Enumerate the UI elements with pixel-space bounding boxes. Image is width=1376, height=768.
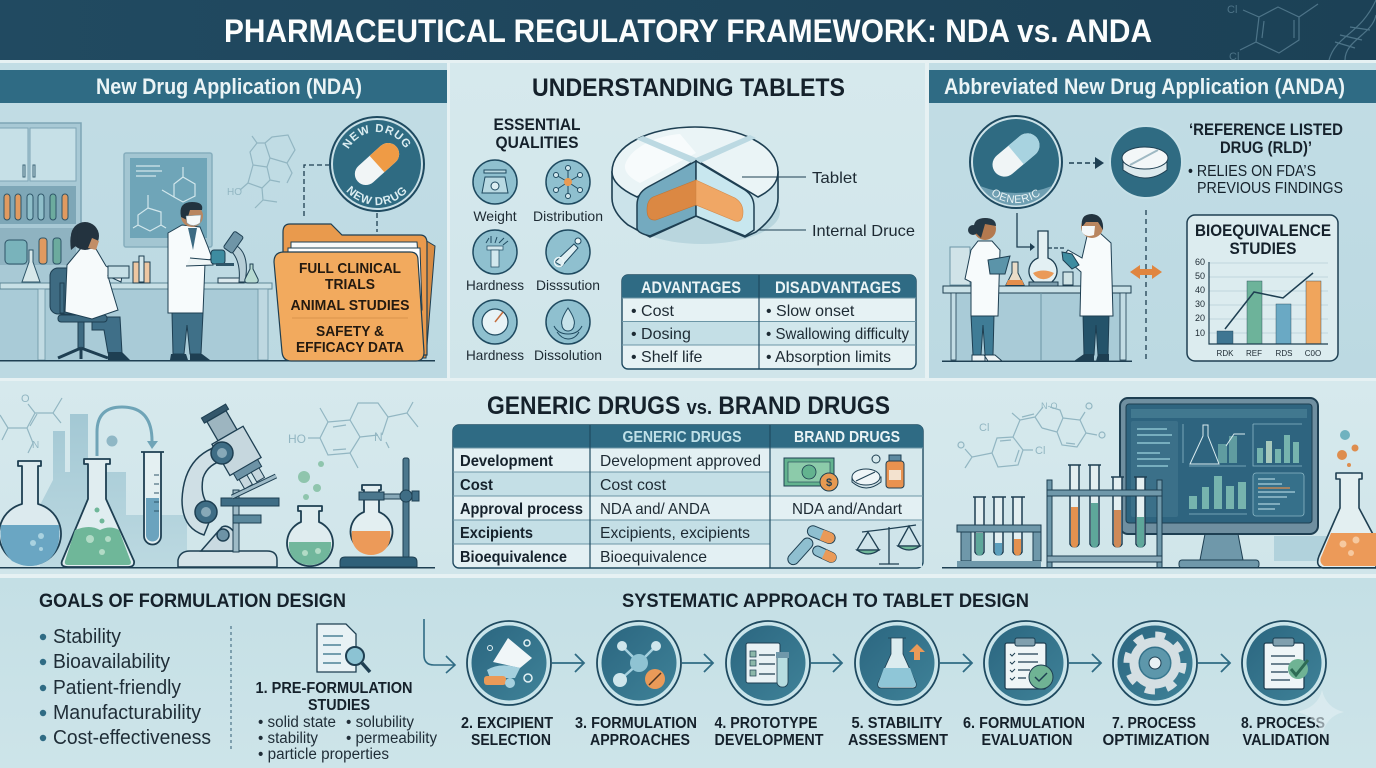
icon: document with magnifier: [317, 624, 370, 672]
label: [1102, 715, 1210, 749]
arrow: [1198, 654, 1230, 672]
vertical dashed divider: [1145, 210, 1147, 362]
label: 7. PROCESS: [1112, 715, 1196, 732]
molecule right of microscope: N: [374, 430, 383, 444]
male scientist: [1062, 214, 1113, 361]
bars: [1217, 281, 1321, 344]
curved arrow: [97, 407, 158, 456]
label: Dissolution: [534, 347, 602, 363]
molecule: N-O: [1041, 401, 1058, 411]
arrow: [940, 654, 972, 672]
row labels: [460, 453, 583, 566]
bioequivalence chart card: BIOEQUIVALENCE: [1195, 221, 1331, 240]
folder text: EFFICACY DATA: [296, 339, 404, 356]
folder text: ANIMAL STUDIES: [290, 297, 410, 314]
small tube rack: [957, 497, 1041, 568]
new drug badge: NEW DRUG: [346, 186, 406, 206]
icon: money: $: [826, 477, 832, 489]
essential qualities heading: [494, 115, 580, 152]
axis labels: 60: [1195, 257, 1205, 267]
essential qualities heading: ESSENTIAL: [494, 115, 580, 134]
microscope: [216, 231, 258, 283]
step 1: • particle properties: [258, 746, 389, 763]
icon: capsules: [786, 524, 838, 567]
main title: PHARMACEUTICAL REGULATORY FRAMEWORK: NDA vs. ANDA: [224, 13, 1152, 49]
icon: tablet and bottle: [852, 455, 904, 488]
lab bench: [0, 283, 435, 362]
axis labels: 20: [1195, 313, 1205, 323]
seated scientist: [50, 222, 150, 360]
generic column: [600, 453, 761, 566]
goals list: Manufacturability: [53, 702, 201, 724]
label: [1241, 715, 1330, 749]
molecule: Cl: [1035, 445, 1045, 457]
axis labels: 50: [1195, 271, 1205, 281]
computer monitor: [1120, 398, 1334, 568]
advantages table: • Dosing: [631, 326, 691, 343]
orange flask: [1318, 430, 1376, 568]
test tube: [141, 452, 164, 544]
generic column: NDA and/ ANDA: [600, 501, 710, 518]
label: OPTIMIZATION: [1102, 732, 1210, 749]
table headers: BRAND DRUGS: [794, 429, 900, 446]
step 6: [984, 621, 1068, 705]
bioequivalence chart card: [1187, 215, 1338, 361]
brand cell text: NDA and/Andart: [792, 501, 903, 518]
label: [848, 715, 948, 749]
header molecule decoration: Cl: [1227, 4, 1237, 16]
header molecule decoration: [1227, 0, 1376, 63]
whiteboard with molecule: [124, 153, 212, 247]
axis labels: 30: [1195, 299, 1205, 309]
monitor charts: [1189, 435, 1299, 509]
molecule right of microscope: [288, 402, 418, 468]
generic badge: OENERIC: [992, 190, 1040, 204]
connector arrow: [1017, 213, 1066, 251]
step 1: • solubility: [346, 714, 414, 731]
axis labels: RDS: [1276, 349, 1292, 358]
RLD tablet badge: [1110, 126, 1182, 198]
step 5: [855, 621, 939, 705]
advantages table: • Cost: [631, 303, 674, 320]
dotted divider: [230, 626, 232, 752]
new drug badge: [329, 116, 425, 212]
dashed connector: [304, 165, 377, 232]
step 8: [1242, 621, 1326, 705]
label: Hardness: [466, 277, 524, 293]
header banner: [0, 0, 1376, 63]
advantages table: • Absorption limits: [766, 349, 891, 366]
label: 6. FORMULATION: [963, 715, 1085, 732]
folder text: TRIALS: [325, 276, 375, 293]
label: [963, 715, 1085, 749]
dashed arrow to RLD: [1069, 157, 1104, 169]
comparison table: [453, 425, 923, 568]
molecule outline: [240, 135, 295, 208]
icon: dissolution tool: [546, 230, 590, 274]
systematic heading: SYSTEMATIC APPROACH TO TABLET DESIGN: [622, 590, 1029, 612]
RLD text: PREVIOUS FINDINGS: [1197, 180, 1343, 197]
step 3: [597, 621, 681, 705]
standing scientist: [168, 202, 225, 360]
icon: money: [784, 458, 838, 491]
step 4: [726, 621, 810, 705]
icon: balance scale: [857, 525, 920, 564]
bench and equipment: [942, 231, 1132, 362]
advantages table: • Shelf life: [631, 349, 703, 366]
hook arrow: [424, 619, 455, 673]
step 1: • solid state: [258, 714, 336, 731]
folder: [274, 224, 435, 361]
tablet callouts: Internal Druce: [812, 223, 915, 240]
label: APPROACHES: [590, 732, 690, 749]
new drug badge: NEW DRUG: [342, 124, 410, 149]
ANDA heading band: Abbreviated New Drug Application (ANDA): [944, 74, 1345, 99]
generic column: Bioequivalence: [600, 549, 707, 566]
step 1: STUDIES: [308, 697, 370, 714]
molecule: [958, 401, 1105, 468]
molecule left: N: [32, 440, 39, 451]
label: ASSESSMENT: [848, 732, 948, 749]
generic column: Cost cost: [600, 477, 667, 494]
panel: lab illustration left: [0, 381, 1376, 768]
icon: hardness: [473, 230, 517, 274]
folder text: [290, 260, 410, 356]
heading: UNDERSTANDING TABLETS: [532, 74, 845, 102]
arrow: [682, 654, 713, 672]
panel: ANDA: [929, 63, 1376, 378]
row labels: Excipients: [460, 525, 533, 542]
goals list: Bioavailability: [53, 651, 170, 673]
lab cabinet and shelves: [0, 123, 81, 285]
tablet callouts: Tablet: [812, 170, 858, 187]
label: EVALUATION: [982, 732, 1072, 749]
label: 5. STABILITY: [852, 715, 943, 732]
row labels: Bioequivalence: [460, 549, 567, 566]
lab illustration right: [942, 398, 1376, 568]
floor line: [0, 567, 435, 568]
step 2: [467, 621, 551, 705]
label: DEVELOPMENT: [714, 732, 824, 749]
table headers: [622, 429, 900, 446]
RLD text: • RELIES ON FDA’S: [1188, 163, 1316, 180]
molecule left: O: [21, 393, 30, 405]
generic column: Excipients, excipients: [600, 525, 750, 542]
sparkle watermark: [1296, 690, 1344, 736]
label: 3. FORMULATION: [575, 715, 697, 732]
floor line right: [942, 567, 1376, 568]
large tube rack: [1047, 465, 1162, 568]
advantages table: ADVANTAGES: [641, 279, 741, 297]
advantages table: • Slow onset: [766, 303, 855, 320]
female scientist: [965, 218, 1010, 361]
RLD text: [1188, 121, 1343, 197]
icon: hardness gauge: [473, 300, 517, 344]
advantages table: [622, 275, 916, 369]
label: VALIDATION: [1242, 732, 1330, 749]
label: Weight: [473, 208, 517, 224]
label: 4. PROTOTYPE: [714, 715, 818, 732]
panel: understanding tablets: [450, 63, 925, 378]
ring stand flask orange: [340, 458, 419, 567]
RLD text: ‘REFERENCE LISTED: [1189, 121, 1343, 139]
axis labels: 40: [1195, 285, 1205, 295]
molecule right of microscope: HO: [288, 432, 306, 446]
label: 8. PROCESS: [1241, 715, 1325, 732]
row labels: Cost: [460, 477, 493, 494]
NDA heading band: [0, 70, 447, 103]
label: [575, 715, 697, 749]
arrow: [552, 654, 584, 672]
goals list: Patient-friendly: [53, 677, 181, 699]
row labels: Approval process: [460, 501, 583, 518]
essential qualities heading: QUALITIES: [496, 133, 578, 152]
goals heading: GOALS OF FORMULATION DESIGN: [39, 590, 346, 612]
label: Disssution: [536, 277, 600, 293]
folder text: FULL CLINICAL: [299, 260, 401, 277]
axis labels: REF: [1246, 349, 1262, 358]
goals list: Stability: [53, 626, 121, 648]
central microscope: [178, 402, 279, 567]
goals list: [40, 626, 211, 749]
header molecule decoration: Cl: [1229, 51, 1239, 63]
NDA heading band: New Drug Application (NDA): [96, 74, 362, 99]
label: [461, 715, 553, 749]
panel: NDA: [0, 63, 447, 378]
step 1: • permeability: [346, 730, 437, 747]
arrow: [1069, 654, 1101, 672]
arrow: [811, 654, 842, 672]
axis labels: [1195, 257, 1321, 358]
icon: distribution: [546, 160, 590, 204]
step 1: [256, 680, 437, 763]
generic column: Development approved: [600, 453, 761, 470]
tablet cross-section: [612, 127, 780, 244]
axis labels: RDK: [1217, 349, 1234, 358]
goals list: Cost-effectiveness: [53, 727, 211, 749]
icon: droplet: [546, 300, 590, 344]
factory silhouette: [40, 414, 187, 567]
orange double arrow: [1130, 265, 1162, 279]
icon: weight: [473, 160, 517, 204]
advantages table: • Swallowing difficulty: [766, 326, 909, 343]
molecule left: [0, 393, 62, 453]
bioequivalence chart card: STUDIES: [1230, 239, 1296, 258]
label: SELECTION: [471, 732, 551, 749]
label: [714, 715, 824, 749]
tablet callouts: [742, 170, 915, 240]
axis labels: 10: [1195, 328, 1205, 338]
table headers: GENERIC DRUGS: [622, 429, 742, 446]
panel: goals and systematic approach: [0, 578, 1376, 768]
row labels: Development: [460, 453, 553, 470]
folder text: SAFETY &: [316, 323, 384, 340]
small round flask green: [287, 461, 333, 566]
step 1: • stability: [258, 730, 318, 747]
molecule: Cl: [979, 422, 989, 434]
label: Distribution: [533, 208, 603, 224]
round flask blue: [0, 461, 61, 566]
label: 2. EXCIPIENT: [461, 715, 553, 732]
generic badge: [969, 115, 1063, 209]
heading: generic vs brand: GENERIC DRUGS vs. BRAND DRUGS: [487, 392, 890, 420]
axis labels: C0O: [1305, 349, 1321, 358]
label: Hardness: [466, 347, 524, 363]
molecule label HO: HO: [227, 187, 242, 198]
step 7: [1113, 621, 1197, 705]
erlenmeyer green: [62, 459, 134, 567]
RLD text: DRUG (RLD)’: [1220, 139, 1312, 157]
step 1: 1. PRE-FORMULATION: [256, 680, 412, 697]
advantages table: DISADVANTAGES: [775, 279, 901, 297]
